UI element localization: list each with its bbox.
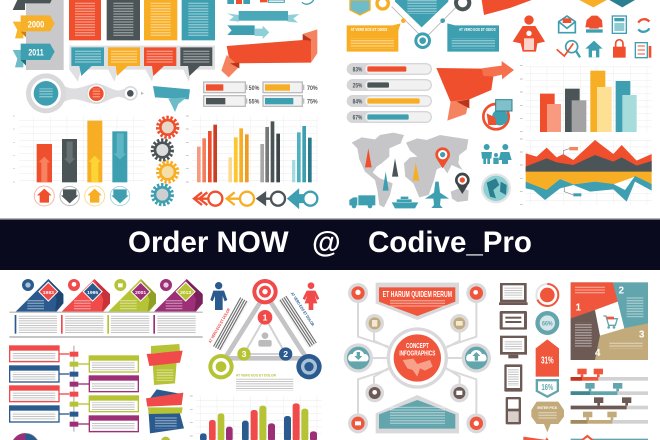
outer node icons xyxy=(344,283,491,433)
grey column with year ribbons: 2000 xyxy=(28,19,44,29)
icon: ship xyxy=(392,197,418,208)
slanted text blocks xyxy=(207,291,317,351)
triangle diagram: 1 xyxy=(263,312,268,322)
percent rings and shields: 16% xyxy=(541,383,553,392)
bottom bar chart xyxy=(190,396,322,440)
top diamond diagram xyxy=(350,0,471,49)
batteries xyxy=(204,82,318,106)
triangle diagram xyxy=(208,279,322,379)
icon: hero family xyxy=(513,15,545,52)
triangle caption xyxy=(236,373,293,391)
square four-part diagram: 1 xyxy=(576,303,582,314)
tan badge xyxy=(531,402,564,432)
slanted text blocks: AT VERO EOS ET DOLOR xyxy=(290,291,315,327)
icon: globe with arrow xyxy=(483,100,512,129)
triangle diagram: 3 xyxy=(242,349,247,359)
timeline text columns xyxy=(9,312,203,338)
headline pentagon xyxy=(376,283,459,320)
banner text: Codive_Pro xyxy=(368,226,532,259)
tan badge: ENTER PICK xyxy=(537,405,557,410)
headline pentagon: ET HARUM QUIDEM RERUM xyxy=(383,289,452,299)
progress pills: 67% xyxy=(353,114,363,121)
banner xyxy=(0,220,660,270)
icon: woman xyxy=(303,282,319,310)
teal callout: AT VERO EOS ET ODIOS xyxy=(459,27,496,32)
top right ribbons xyxy=(227,0,314,39)
grey column with year ribbons xyxy=(13,0,64,70)
square four-part diagram xyxy=(571,282,648,360)
blue and red ribbon card xyxy=(146,389,184,433)
percent rings and shields: 31% xyxy=(541,355,554,366)
bottom cropped pieces xyxy=(523,435,648,440)
timeline pentagons: 1995 xyxy=(87,290,98,296)
top origami pieces xyxy=(482,0,635,15)
yellow callout: AT VERO EOS ET ODIOS xyxy=(351,27,387,32)
batteries: 75% xyxy=(307,99,318,106)
banner text: @ xyxy=(312,226,341,259)
panel: top right infographics xyxy=(347,0,652,208)
teal origami flag xyxy=(153,86,190,112)
triangle diagram: 2 xyxy=(283,349,288,359)
square four-part diagram: 4 xyxy=(595,348,601,359)
small timeline icons xyxy=(22,279,172,291)
four text panels xyxy=(69,0,215,40)
banner text: Order NOW xyxy=(128,226,289,259)
icon: plane xyxy=(425,182,449,208)
square four-part diagram: 2 xyxy=(619,285,625,296)
yellow callout xyxy=(347,23,401,52)
progress pills: 84% xyxy=(353,98,363,105)
speech bubbles row xyxy=(69,46,215,82)
grey column with year ribbons: 2011 xyxy=(28,48,44,58)
slanted text blocks: AT VERO EOS ET DOLOR xyxy=(207,307,231,344)
left bar chart xyxy=(13,116,145,182)
icon: world map with pins xyxy=(352,133,470,207)
batteries: 55% xyxy=(249,99,259,106)
triangle caption: AT VERO EOS ET DOLOR xyxy=(236,373,276,378)
vertical timeline list xyxy=(10,346,138,432)
area chart xyxy=(520,139,652,205)
concept circle: INFOGRAPHICS xyxy=(399,350,436,357)
panel: top left infographics xyxy=(13,0,318,207)
batteries: 50% xyxy=(249,85,259,92)
icon: man xyxy=(210,282,227,310)
percent rings and shields: 66% xyxy=(542,321,553,327)
big red ribbon xyxy=(221,29,317,77)
square four-part diagram: 3 xyxy=(639,329,645,340)
panel: bottom left infographics xyxy=(9,279,322,440)
concept circle: CONCEPT xyxy=(406,343,429,350)
timeline pentagons: 2001 xyxy=(135,290,146,296)
right two-series bar chart xyxy=(520,66,652,132)
bottom pentagon xyxy=(376,395,459,433)
divider above banner xyxy=(0,218,660,220)
progress pills: 25% xyxy=(353,82,363,89)
teal callout xyxy=(447,23,499,52)
percent rings and shields xyxy=(535,284,559,398)
olive and red ribbon card xyxy=(147,344,183,385)
icon: truck xyxy=(349,195,375,208)
concept circle xyxy=(387,327,448,389)
connector lines xyxy=(358,300,476,413)
icon: family xyxy=(481,144,512,164)
gears xyxy=(153,118,177,204)
pie chart and olive mark xyxy=(11,433,170,440)
device icons xyxy=(499,283,528,424)
batteries: 70% xyxy=(307,85,318,92)
timeline pentagons: 2013 xyxy=(180,290,191,296)
progress pills: 83% xyxy=(353,66,363,73)
origami arrow xyxy=(436,61,514,121)
right grouped bar chart xyxy=(186,116,318,182)
timeline pentagons xyxy=(16,279,203,312)
percent arrow circles xyxy=(34,186,130,206)
progress pills xyxy=(347,63,432,123)
timeline pentagons: 1983 xyxy=(43,290,54,296)
process circles timeline xyxy=(26,73,144,113)
icon grid xyxy=(557,16,651,58)
icon: earth globe xyxy=(481,173,511,203)
arrows row xyxy=(194,191,317,207)
panel: bottom right infographics xyxy=(344,282,648,440)
range bars xyxy=(571,369,648,424)
